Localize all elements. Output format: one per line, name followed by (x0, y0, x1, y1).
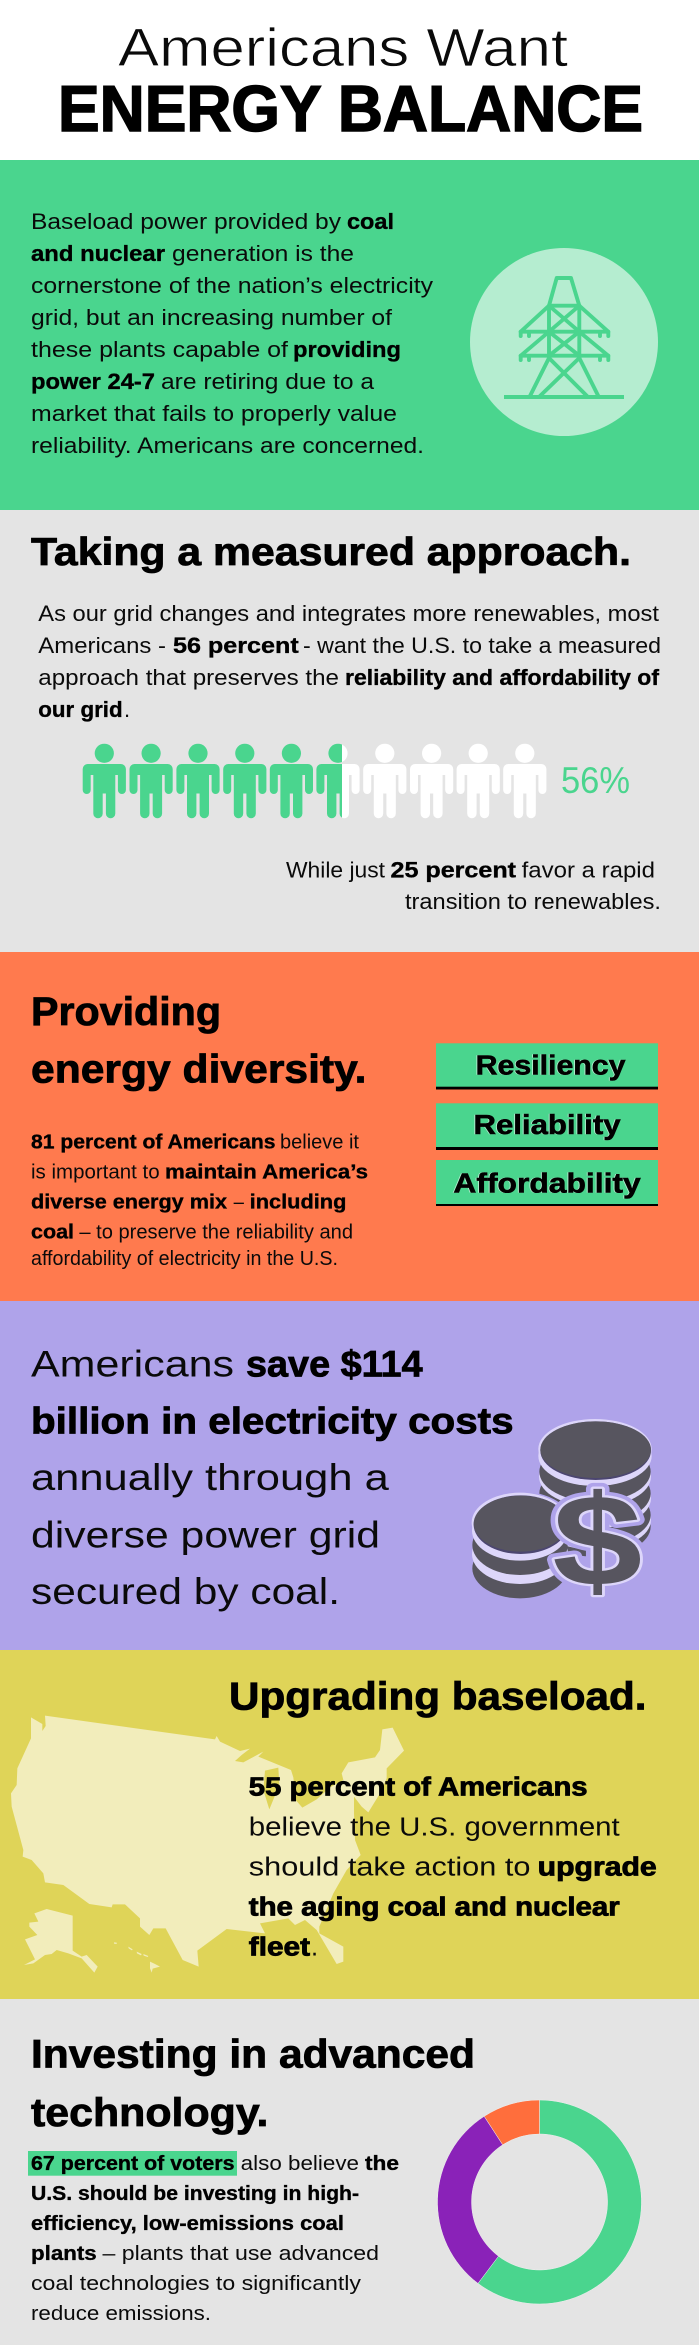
text block: energy mix paragraph: – (234, 1191, 245, 1213)
text block: baseload paragraph: these plants capable of (31, 337, 289, 362)
text block: upgrade paragraph: fleet (249, 1934, 311, 1962)
text block: investing paragraph: the (365, 2153, 399, 2175)
text block: baseload paragraph: power 24-7 (31, 369, 155, 394)
text block: measured approach paragraph (38, 601, 661, 722)
map: United States silhouette (11, 1716, 404, 1973)
text block: savings statement (31, 1344, 514, 1612)
panel: baseload intro (0, 160, 699, 510)
text block: savings statement: diverse power grid (31, 1514, 380, 1555)
text block: upgrade paragraph: upgrade (538, 1854, 657, 1882)
label: Resiliency: Resiliency (476, 1049, 626, 1080)
text block: rapid transition note: 25 percent (390, 858, 517, 883)
heading: Providing energy diversity: energy diversity. (31, 1047, 366, 1091)
text block: energy mix paragraph: maintain America’s (165, 1161, 368, 1183)
title: ENERGY BALANCE: ENERGY BALANCE (58, 72, 643, 145)
text block: measured approach paragraph: reliability and affordability of (345, 665, 660, 690)
text block: baseload paragraph: Baseload power provided by (31, 209, 341, 234)
text block: baseload paragraph: market that fails to properly value (31, 401, 397, 426)
text block: investing paragraph (31, 2153, 399, 2325)
text block: baseload paragraph: and nuclear (31, 241, 165, 266)
text block: upgrade paragraph: the aging coal and nuclear (249, 1894, 620, 1922)
panel: energy diversity (0, 952, 699, 1301)
text block: savings statement: annually through a (31, 1457, 389, 1498)
icon: coin stacks with dollar sign: $ (552, 1467, 642, 1613)
text block: baseload paragraph: coal (347, 209, 394, 234)
heading: Investing in advanced technology (31, 2033, 475, 2135)
panel: savings (0, 1301, 699, 1650)
stat label: 56%: 56% (561, 760, 630, 801)
heading: Investing in advanced technology: Investing in advanced (31, 2033, 475, 2077)
text block: baseload paragraph: reliability. Americans are concerned. (31, 433, 424, 458)
text block: investing paragraph: reduce emissions. (31, 2303, 211, 2325)
text block: rapid transition note: transition to renewables. (405, 889, 661, 914)
text block: baseload paragraph: are retiring due to a (161, 369, 375, 394)
panel: measured approach (0, 510, 699, 952)
text block: energy mix paragraph: 81 percent of Americans (31, 1131, 276, 1153)
text block: investing paragraph: efficiency, low-emissions coal (31, 2213, 344, 2235)
text block: measured approach paragraph: Americans - (38, 633, 166, 658)
text block: baseload paragraph: generation is the (172, 241, 354, 266)
text block: investing paragraph: also believe (241, 2153, 359, 2175)
text block: energy mix paragraph: diverse energy mix (31, 1191, 227, 1213)
text block: baseload paragraph: providing (293, 337, 401, 362)
heading: Upgrading baseload: Upgrading baseload. (229, 1675, 646, 1718)
text block: savings statement: save $114 (246, 1344, 423, 1385)
text block: upgrade paragraph: should take action to (249, 1854, 531, 1882)
text block: energy mix paragraph: affordability of electricity in the U.S. (31, 1248, 338, 1270)
text block: rapid transition note: While just (286, 858, 385, 883)
label: Affordability: Affordability (453, 1167, 641, 1198)
text block: measured approach paragraph: . (124, 697, 130, 722)
highlight: 67 percent of voters (28, 2151, 237, 2176)
text block: rapid transition note: favor a rapid (522, 858, 655, 883)
pictogram: 56 percent of people (83, 744, 546, 818)
text block: upgrade paragraph: believe the U.S. government (249, 1814, 620, 1842)
panel: upgrading baseload (0, 1650, 699, 1999)
text block: investing paragraph: U.S. should be investing in high- (31, 2183, 359, 2205)
text block: investing paragraph: coal technologies to significantly (31, 2273, 361, 2295)
title: Americans Want: Americans Want (118, 18, 568, 78)
text block: upgrade paragraph: 55 percent of Americans (249, 1774, 588, 1802)
text block: energy mix paragraph: is important to (31, 1161, 160, 1183)
label: Reliability: Reliability (474, 1109, 621, 1140)
label: Resiliency (436, 1043, 658, 1090)
text block: energy mix paragraph (31, 1131, 368, 1270)
text block: savings statement: billion in electricity costs (31, 1400, 514, 1441)
heading: Investing in advanced technology: technology. (31, 2091, 268, 2135)
text block: investing paragraph: 67 percent of voters (31, 2153, 234, 2175)
icon: coin stacks with dollar sign: $ (552, 1467, 642, 1613)
text block: measured approach paragraph: approach that preserves the (38, 665, 339, 690)
text block: baseload paragraph: grid, but an increasing number of (31, 305, 393, 330)
text block: measured approach paragraph: 56 percent (173, 633, 299, 658)
text block: investing paragraph: plants (31, 2243, 97, 2265)
text block: rapid transition note (286, 858, 661, 914)
text block: measured approach paragraph: - want the U.S. to take a measured (303, 633, 661, 658)
panel: title header (0, 0, 699, 160)
text block: energy mix paragraph: coal (31, 1221, 74, 1243)
heading: Providing energy diversity (31, 990, 366, 1091)
text block: measured approach paragraph: As our grid changes and integrates more renewables, most (38, 601, 659, 626)
label: Affordability (436, 1160, 658, 1206)
text block: energy mix paragraph: believe it (280, 1131, 359, 1153)
text block: measured approach paragraph: our grid (38, 697, 123, 722)
panel: advanced technology (0, 1999, 699, 2345)
text block: energy mix paragraph: – to preserve the reliability and (79, 1221, 353, 1243)
text block: upgrade paragraph: . (311, 1934, 318, 1962)
text block: savings statement: secured by coal. (31, 1571, 340, 1612)
text block: investing paragraph: – plants that use advanced (102, 2243, 379, 2265)
heading: Providing energy diversity: Providing (31, 990, 221, 1034)
text block: upgrade paragraph (249, 1774, 657, 1962)
heading: Taking a measured approach: Taking a measured approach. (31, 531, 631, 574)
text block: energy mix paragraph: including (250, 1191, 346, 1213)
label: Reliability (436, 1103, 658, 1150)
chart: donut (437, 2100, 641, 2304)
text block: savings statement: Americans (31, 1344, 234, 1385)
text block: baseload paragraph (31, 209, 433, 458)
text block: baseload paragraph: cornerstone of the nation’s electricity (31, 273, 433, 298)
icon: coin stacks with dollar sign (468, 1419, 652, 1613)
icon: transmission tower (470, 248, 658, 436)
